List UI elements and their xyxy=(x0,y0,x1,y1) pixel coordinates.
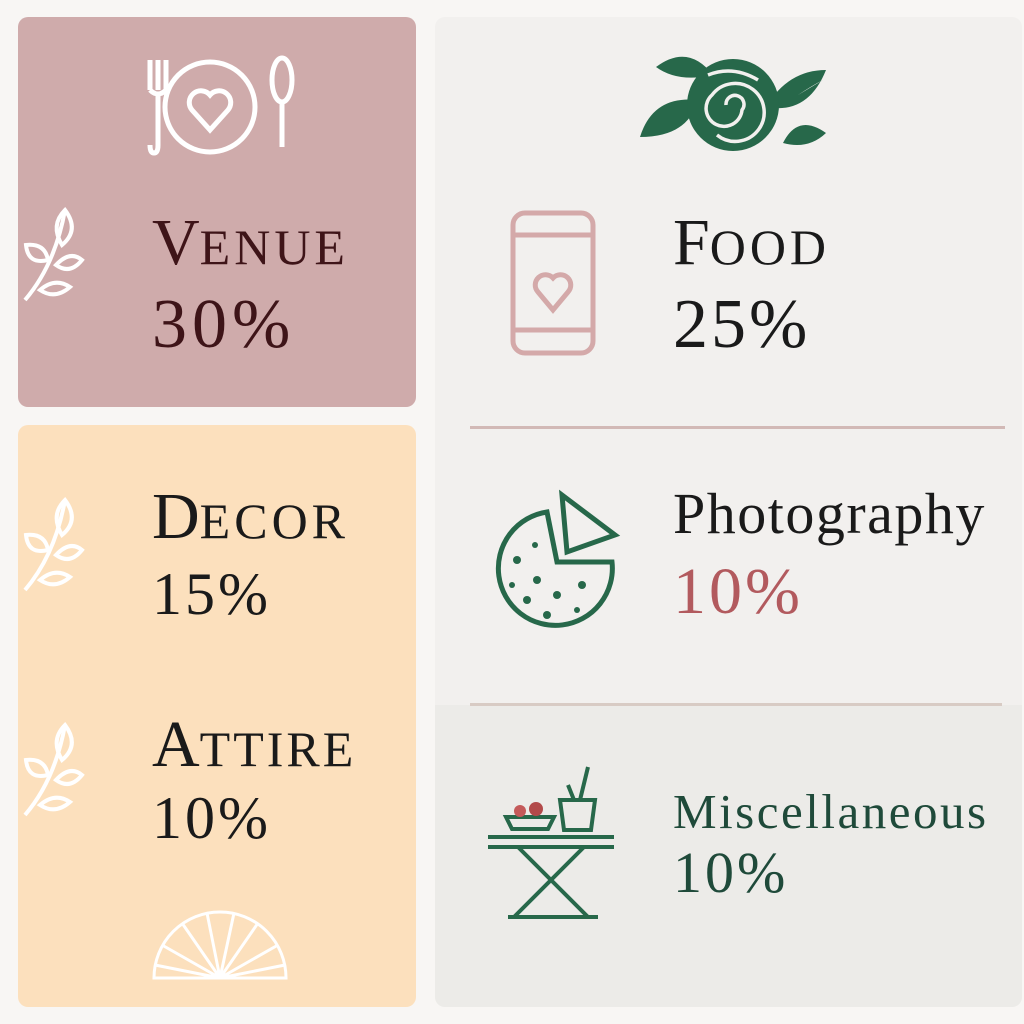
icon: phone with heart xyxy=(510,210,596,356)
text: miscellaneous: Miscellaneous xyxy=(673,784,989,839)
text: decor xyxy=(152,480,349,627)
panel: miscellaneous background xyxy=(435,705,1022,1007)
divider lines xyxy=(470,426,1005,429)
text: food: 25% xyxy=(673,286,810,363)
text: photography: 10% xyxy=(673,555,803,628)
icon: pie xyxy=(496,490,620,628)
icon: leaf sprig decor xyxy=(24,497,85,591)
text: venue: 30% xyxy=(152,286,295,363)
icon: rose xyxy=(640,56,826,151)
panel: right column xyxy=(435,17,1022,1007)
text: venue: VENUE xyxy=(152,206,349,279)
icon: half fan xyxy=(152,910,288,980)
text: food xyxy=(673,206,830,363)
text: attire: ATTIRE xyxy=(152,708,356,781)
panel: decor and attire xyxy=(18,425,416,1007)
icon: leaf sprig attire xyxy=(24,722,85,816)
text: attire: 10% xyxy=(152,785,271,851)
icon: leaf sprig venue xyxy=(24,207,85,302)
text: food: FOOD xyxy=(673,206,830,279)
icon: table with food xyxy=(488,766,614,919)
text: attire xyxy=(152,708,356,851)
text: miscellaneous: 10% xyxy=(673,840,788,905)
text: photography: Photography xyxy=(673,481,986,546)
icon: plate with cutlery xyxy=(148,56,294,156)
text: photography xyxy=(673,481,986,628)
text: miscellaneous xyxy=(673,784,989,905)
text: decor: DECOR xyxy=(152,480,349,553)
panel: venue xyxy=(18,17,416,407)
text: venue xyxy=(152,206,349,363)
text: decor: 15% xyxy=(152,561,271,627)
